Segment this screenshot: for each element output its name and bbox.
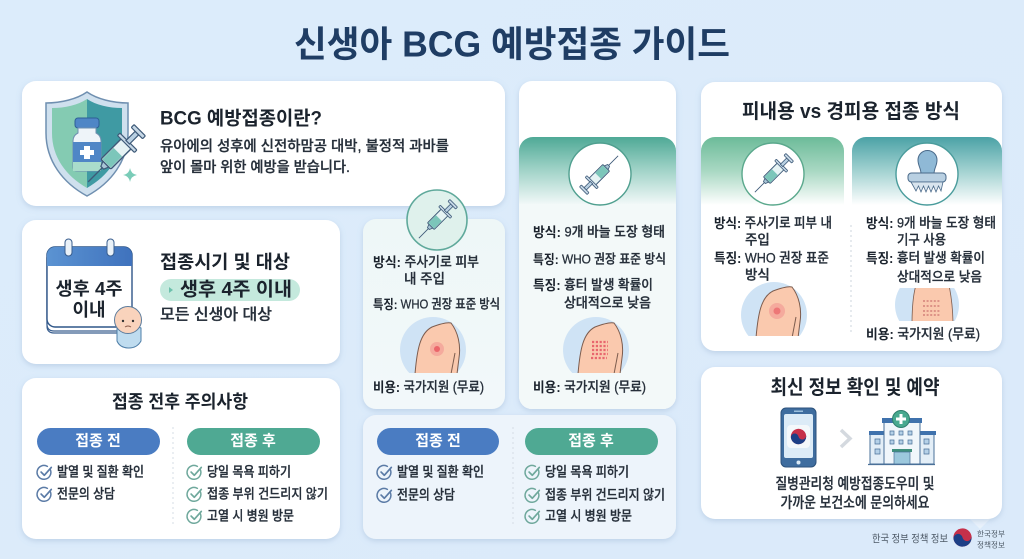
- icon: hospital: [868, 410, 936, 464]
- title: 신생아 BCG 예방접종 가이드: [294, 24, 730, 64]
- footer source: [872, 527, 1005, 550]
- text block: [776, 476, 934, 512]
- method and feature text: 상대적으로 낮음: [564, 296, 651, 310]
- left column: intradermal: 방식: 주사기로 피부 내: [714, 216, 832, 230]
- left column: intradermal: 주입: [745, 232, 770, 248]
- after vaccination: 접종 부위 건드리지 않기: [545, 488, 665, 502]
- method text: 방식: 주사기로 피부: [373, 254, 479, 270]
- highlight pill: 생후 4주 이내: [180, 278, 292, 300]
- before vaccination: 접종 전: [75, 432, 121, 450]
- left column: intradermal: 특징: WHO 권장 표준: [714, 250, 829, 266]
- before vaccination: 발열 및 질환 확인: [397, 464, 484, 480]
- method and feature text: 특징: 흉터 발생 확률이: [533, 276, 653, 292]
- panel: timing and target: [22, 220, 340, 364]
- icon: calendar with baby: 이내: [72, 300, 106, 320]
- footer source: 한국정부: [977, 528, 1005, 538]
- before vaccination: [37, 428, 160, 502]
- right column: percutaneous: [852, 137, 1002, 342]
- icon: syringe badge: [569, 143, 631, 205]
- text block: 앞이 몰마 위한 예방을 받습니다.: [160, 159, 350, 176]
- panel: precautions: [22, 378, 340, 539]
- icon: calendar with baby: 생후 4주: [56, 279, 122, 299]
- right column: percutaneous: 기구 사용: [897, 232, 946, 248]
- icon: calendar with baby: [47, 239, 142, 348]
- panel: intradermal vs percutaneous comparison: [701, 82, 1002, 351]
- panel: percutaneous card, middle: [519, 81, 676, 409]
- before vaccination: 발열 및 질환 확인: [57, 464, 144, 480]
- icon: shield with vial and syringe: [46, 92, 148, 196]
- left column: intradermal: [701, 137, 844, 348]
- right column: percutaneous: 특징: 흉터 발생 확률이: [866, 250, 985, 266]
- after vaccination: [525, 428, 665, 524]
- method text: [373, 254, 479, 286]
- icon: syringe badge: [407, 190, 467, 250]
- after vaccination: 접종 후: [568, 432, 614, 450]
- cost text: 비용: 국가지원 (무료): [373, 380, 484, 394]
- heading: 접종시기 및 대상: [160, 252, 290, 272]
- after vaccination: [187, 428, 328, 524]
- icon: phone: [781, 408, 816, 467]
- panel: checklist, middle bottom: [363, 415, 676, 539]
- icon: arm with injection mark: [400, 317, 466, 373]
- panel: what is BCG: [22, 81, 505, 206]
- right column: percutaneous: 비용: 국가지원 (무료): [866, 326, 980, 342]
- after vaccination: 접종 부위 건드리지 않기: [207, 486, 328, 502]
- heading: 최신 정보 확인 및 예약: [770, 376, 940, 399]
- feature text: 특징: WHO 권장 표준 방식: [373, 296, 500, 312]
- method and feature text: [533, 224, 666, 310]
- footer source: 한국 정부 정책 정보: [872, 533, 948, 545]
- right column: percutaneous: 방식: 9개 바늘 도장 형태: [866, 216, 996, 230]
- after vaccination: 당일 목욕 피하기: [207, 464, 291, 480]
- footer source: 정책정보: [977, 540, 1005, 550]
- method and feature text: 특징: WHO 권장 표준 방식: [533, 252, 666, 266]
- before vaccination: 전문의 상담: [57, 486, 115, 502]
- method text: 내 주입: [404, 272, 445, 286]
- after vaccination: 접종 후: [230, 432, 276, 450]
- text block: 질병관리청 예방접종도우미 및: [776, 476, 934, 492]
- right column: percutaneous: 상대적으로 낮음: [897, 270, 982, 284]
- arrow: chevron: [841, 430, 850, 447]
- text block: 가까운 보건소에 문의하세요: [780, 494, 930, 512]
- before vaccination: 접종 전: [415, 432, 461, 450]
- callout tail: [968, 517, 992, 529]
- before vaccination: [377, 428, 499, 502]
- text block: 유아에의 성후에 신전하맘공 대박, 불정적 과바를: [160, 138, 449, 155]
- before vaccination: 전문의 상담: [397, 488, 455, 502]
- text block: 모든 신생아 대상: [160, 306, 272, 324]
- heading: 접종 전후 주의사항: [112, 392, 248, 412]
- after vaccination: 당일 목욕 피하기: [545, 464, 629, 480]
- after vaccination: 고열 시 병원 방문: [545, 508, 632, 524]
- heading: BCG 예방접종이란?: [160, 108, 322, 130]
- method and feature text: 방식: 9개 바늘 도장 형태: [533, 224, 665, 240]
- left column: intradermal: 방식: [745, 268, 770, 282]
- heading: 피내용 vs 경피용 접종 방식: [742, 100, 960, 123]
- panel: intradermal card, middle: [363, 190, 505, 409]
- text block: [160, 138, 449, 176]
- after vaccination: 고열 시 병원 방문: [207, 508, 294, 524]
- cost text: 비용: 국가지원 (무료): [533, 380, 646, 394]
- icon: arm with needle grid: [563, 317, 629, 373]
- panel: info and booking: [701, 367, 1002, 519]
